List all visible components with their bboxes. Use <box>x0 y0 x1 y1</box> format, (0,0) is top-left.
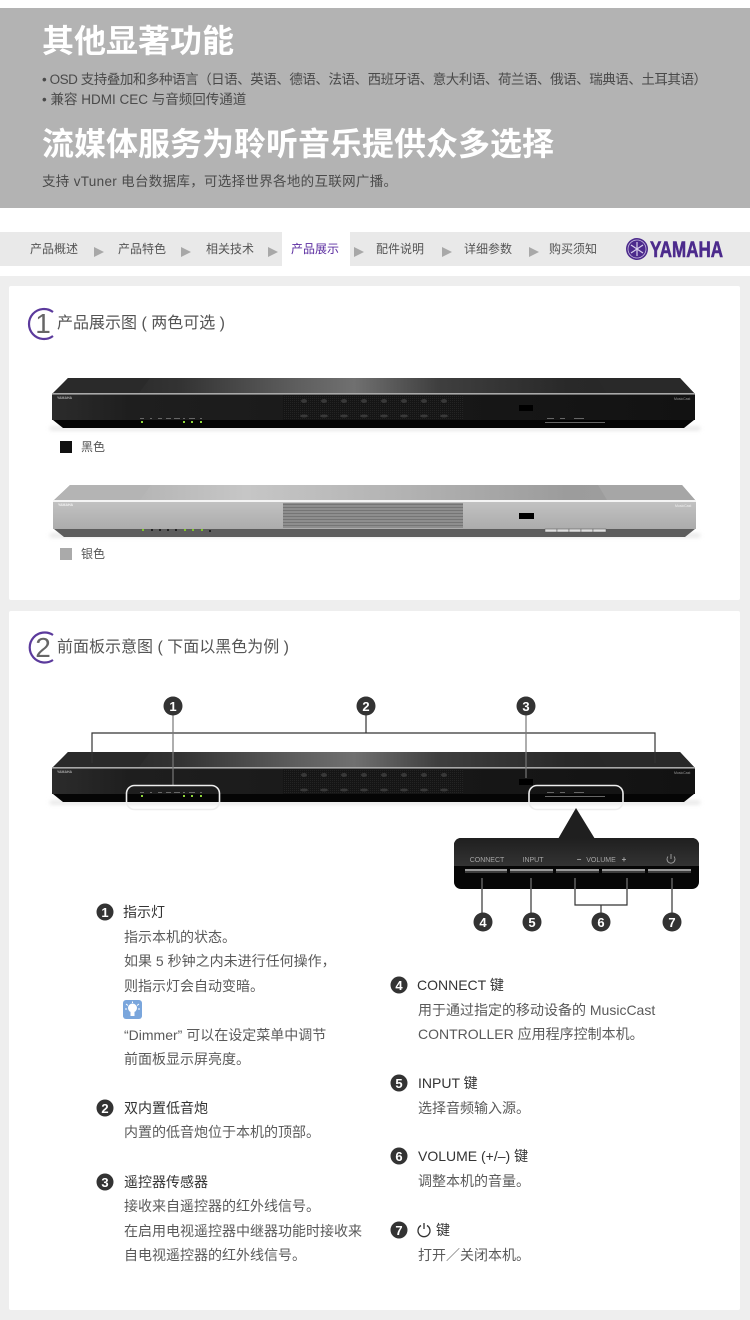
callout: button close-up panel: + <box>622 855 627 864</box>
item 5: input key: 选择音频输入源。 <box>418 1100 530 1116</box>
item 1: indicators: 指示灯 <box>123 904 165 920</box>
callout: button close-up panel: − <box>577 855 582 864</box>
callout lines and brackets <box>92 706 655 785</box>
product: black soundbar diagram: YAMAHA <box>57 770 73 774</box>
item 5: input key: INPUT 键 <box>418 1075 478 1091</box>
section heading 1: 产品展示图 ( 两色可选 ) <box>57 314 225 332</box>
section heading 2 <box>30 632 289 663</box>
product: black soundbar: YAMAHA <box>57 396 73 400</box>
number badge 4: 4 <box>479 915 487 930</box>
item 1: indicators: “Dimmer” 可以在设定菜单中调节 <box>124 1027 326 1043</box>
text: HDMI CEC: • 兼容 HDMI CEC 与音频回传通道 <box>42 91 246 107</box>
product: black soundbar diagram: MusicCast <box>674 771 690 775</box>
logo: YAMAHA: YAMAHA <box>650 237 723 262</box>
number badge 5: 5 <box>528 915 536 930</box>
swatch: silver <box>60 547 105 561</box>
callout: button close-up panel: INPUT <box>522 857 544 864</box>
callout: button close-up panel <box>454 808 699 914</box>
product: black soundbar diagram <box>50 752 700 804</box>
item 6: volume key: VOLUME (+/–) 键 <box>418 1148 528 1164</box>
number badge 5 <box>522 912 542 932</box>
number badge 6: 6 <box>597 915 605 930</box>
item 2: subwoofers: 内置的低音炮位于本机的顶部。 <box>124 1124 320 1140</box>
item 4: connect key: CONNECT 键 <box>417 977 504 993</box>
item 4: connect key: CONTROLLER 应用程序控制本机。 <box>418 1026 644 1042</box>
text: vTuner: 支持 vTuner 电台数据库，可选择世界各地的互联网广播。 <box>42 174 397 189</box>
item 3: remote sensor: 接收来自遥控器的红外线信号。 <box>124 1198 320 1214</box>
navigation bar: 详细参数 <box>464 241 512 256</box>
navigation bar: 产品概述 <box>30 242 78 256</box>
item 6: volume key: 6 <box>395 1149 403 1164</box>
text: OSD languages: • OSD 支持叠加和多种语言（日语、英语、德语、法语、西班牙语、意大利语、荷兰语、俄语、瑞典语、土耳其语） <box>42 71 707 87</box>
item 1: indicators <box>96 904 336 1067</box>
panel: product images <box>9 286 740 600</box>
section heading 2: 前面板示意图 ( 下面以黑色为例 ) <box>57 637 289 656</box>
item 1: indicators: 指示本机的状态。 <box>124 929 236 945</box>
callout: button close-up panel: VOLUME <box>586 857 616 864</box>
content background <box>0 276 750 1320</box>
item 7: power key: 打开／关闭本机。 <box>418 1247 530 1263</box>
item 3: remote sensor: 在启用电视遥控器中继器功能时接收来 <box>124 1223 362 1239</box>
logo: YAMAHA <box>626 237 723 262</box>
number badge 2 top: 2 <box>362 699 370 714</box>
swatch: black <box>60 440 105 454</box>
product: silver soundbar <box>50 485 700 537</box>
item 3: remote sensor <box>96 1174 362 1263</box>
item 4: connect key: 4 <box>395 978 403 993</box>
item 3: remote sensor: 3 <box>101 1175 109 1190</box>
number badge 1 top <box>164 696 182 716</box>
product: silver soundbar: YAMAHA <box>58 503 74 507</box>
navigation bar <box>0 232 750 266</box>
section heading 2: 2 <box>35 632 51 663</box>
number badge 3 top <box>516 696 536 716</box>
item 5: input key: 5 <box>395 1076 403 1091</box>
navigation bar: 产品展示 <box>291 242 339 256</box>
item 4: connect key: 用于通过指定的移动设备的 MusicCast <box>418 1002 655 1018</box>
item 1: indicators: 则指示灯会自动变暗。 <box>124 978 264 994</box>
swatch: black: 黑色 <box>81 440 105 454</box>
number badge 2 top <box>356 696 376 716</box>
callout: button close-up panel: CONNECT <box>470 857 505 864</box>
number badge 7: 7 <box>668 915 676 930</box>
number badge 7 <box>662 912 682 932</box>
item 1: indicators: 1 <box>101 905 109 920</box>
item 1: indicators: 如果 5 秒钟之内未进行任何操作， <box>124 953 336 969</box>
icon: light bulb tip <box>123 1000 142 1019</box>
item 2: subwoofers: 双内置低音炮 <box>124 1100 208 1116</box>
highlight: buttons <box>529 786 623 810</box>
section heading 1: 1 <box>35 308 51 339</box>
banner: other features <box>0 8 750 208</box>
item 6: volume key <box>390 1148 530 1189</box>
swatch: silver: 银色 <box>81 547 105 561</box>
item 6: volume key: 调整本机的音量。 <box>418 1173 530 1189</box>
item 2: subwoofers <box>96 1100 320 1140</box>
product: silver soundbar: MusicCast <box>675 504 691 508</box>
item 2: subwoofers: 2 <box>101 1101 109 1116</box>
product: black soundbar: MusicCast <box>674 397 690 401</box>
item 4: connect key <box>390 976 655 1042</box>
heading: streaming: 流媒体服务为聆听音乐提供众多选择 <box>42 126 554 162</box>
number badge 6 <box>592 912 610 932</box>
navigation bar: 产品特色 <box>118 241 166 256</box>
item 1: indicators: 前面板显示屏亮度。 <box>124 1051 250 1067</box>
item 7: power key: 键 <box>436 1222 450 1238</box>
heading: other features: 其他显著功能 <box>42 23 234 59</box>
item 3: remote sensor: 自电视遥控器的红外线信号。 <box>124 1247 306 1263</box>
panel: front panel diagram <box>9 611 740 1310</box>
number badge 3 top: 3 <box>522 699 530 714</box>
section heading 1 <box>29 308 225 339</box>
highlight: indicators <box>126 786 220 810</box>
product: black soundbar <box>50 378 700 430</box>
number badge 1 top: 1 <box>169 699 177 714</box>
navigation bar: 购买须知 <box>549 241 597 256</box>
item 7: power key: 7 <box>395 1223 403 1238</box>
navigation bar: 配件说明 <box>376 241 424 256</box>
item 7: power key <box>390 1222 530 1263</box>
number badge 4 <box>474 912 492 932</box>
navigation bar: 相关技术 <box>206 242 254 256</box>
item 3: remote sensor: 遥控器传感器 <box>124 1174 208 1190</box>
item 5: input key <box>390 1074 530 1116</box>
